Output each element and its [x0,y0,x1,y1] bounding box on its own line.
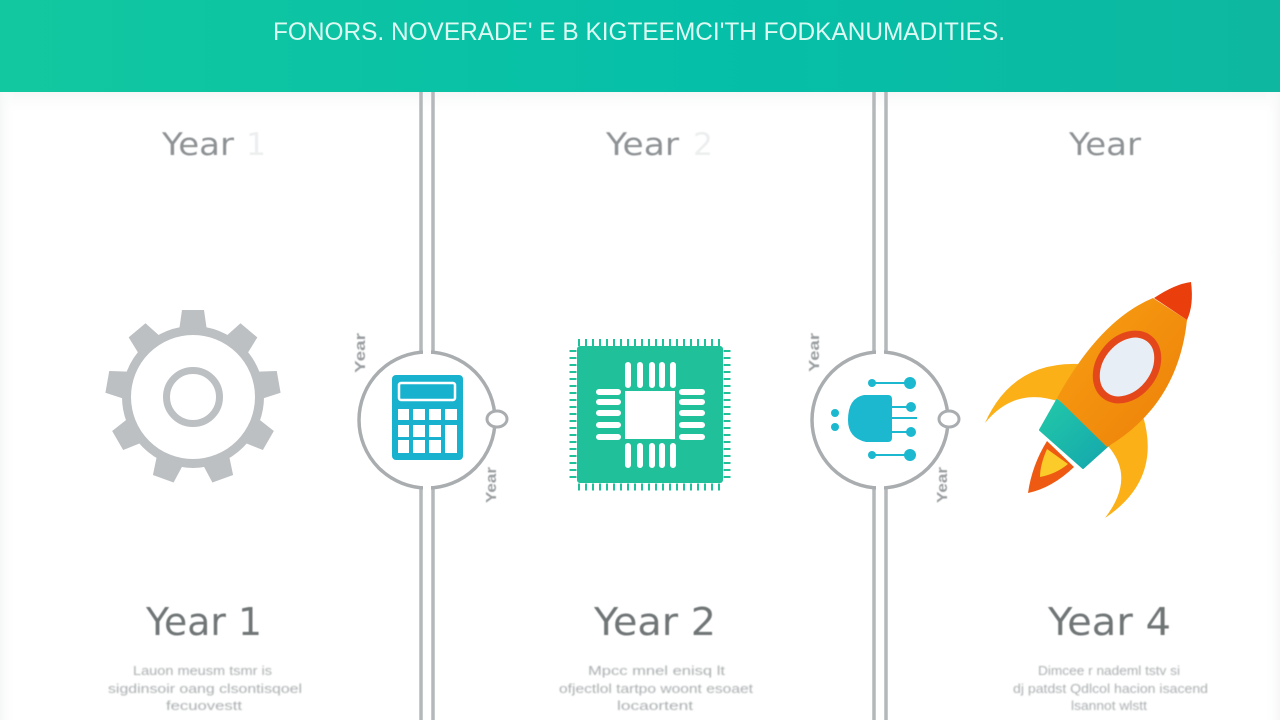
icon: circuit head [831,377,917,461]
top year label 3: Year [1068,127,1141,163]
top year label 1: 1 [246,127,266,163]
top year label 2 [605,127,713,163]
connector dot 1 [487,411,507,427]
year heading 2: Year 2 [593,600,716,644]
icon: green microchip [573,342,727,487]
description 1 [108,663,302,713]
top year label 2: Year [605,127,679,163]
column 1 caption [108,600,302,713]
icon: calculator [392,375,463,460]
flame [1028,441,1074,493]
nozzle [1040,400,1112,468]
small rotated labels: Year [806,333,823,372]
small rotated labels: Year [483,467,500,503]
description 4: Dimcee r nademl tstv si [1038,663,1180,678]
column 2 caption [559,600,753,713]
description 1: fecuovestt [166,698,242,713]
node circle 1 [359,352,495,488]
top year label 1 [161,127,266,163]
icon: rocket [985,282,1192,518]
description 2: Mpcc mnel enisq lt [588,663,725,678]
left fin [985,364,1078,423]
header banner [0,0,1280,92]
icon: gear [105,310,281,484]
description 1: sigdinsoir oang clsontisqoel [108,681,302,696]
connector dot 2 [939,411,959,427]
top year label 2: 2 [693,127,713,163]
description 4: lsannot wlstt [1071,698,1147,713]
nose cone [1154,282,1192,320]
small rotated labels [352,333,951,503]
divider line 1 with circle node and calculator [359,92,507,720]
description 2: locaortent [617,698,694,713]
description 2: ofjectlol tartpo woont esoaet [559,681,753,696]
description 2 [559,663,753,713]
divider line 2 with circle node and AI chip [812,92,959,720]
column 3 caption [1013,600,1208,713]
small rotated labels: Year [352,333,369,373]
right fin [1105,416,1148,518]
node circle 2 [812,352,948,488]
top year label 1: Year [161,127,234,163]
small rotated labels: Year [934,467,951,503]
title: FONORS. NOVERADE' E B KIGTEEMCI'TH FODKANUMADITIES. [273,18,1005,46]
description 4: dj patdst Qdlcol hacion isacend [1013,681,1208,696]
year heading 4: Year 4 [1047,600,1171,644]
body [1057,298,1187,447]
window [1084,322,1170,412]
description 4 [1013,663,1208,713]
description 1: Lauon meusm tsmr is [133,663,273,678]
year heading 1: Year 1 [145,600,262,644]
